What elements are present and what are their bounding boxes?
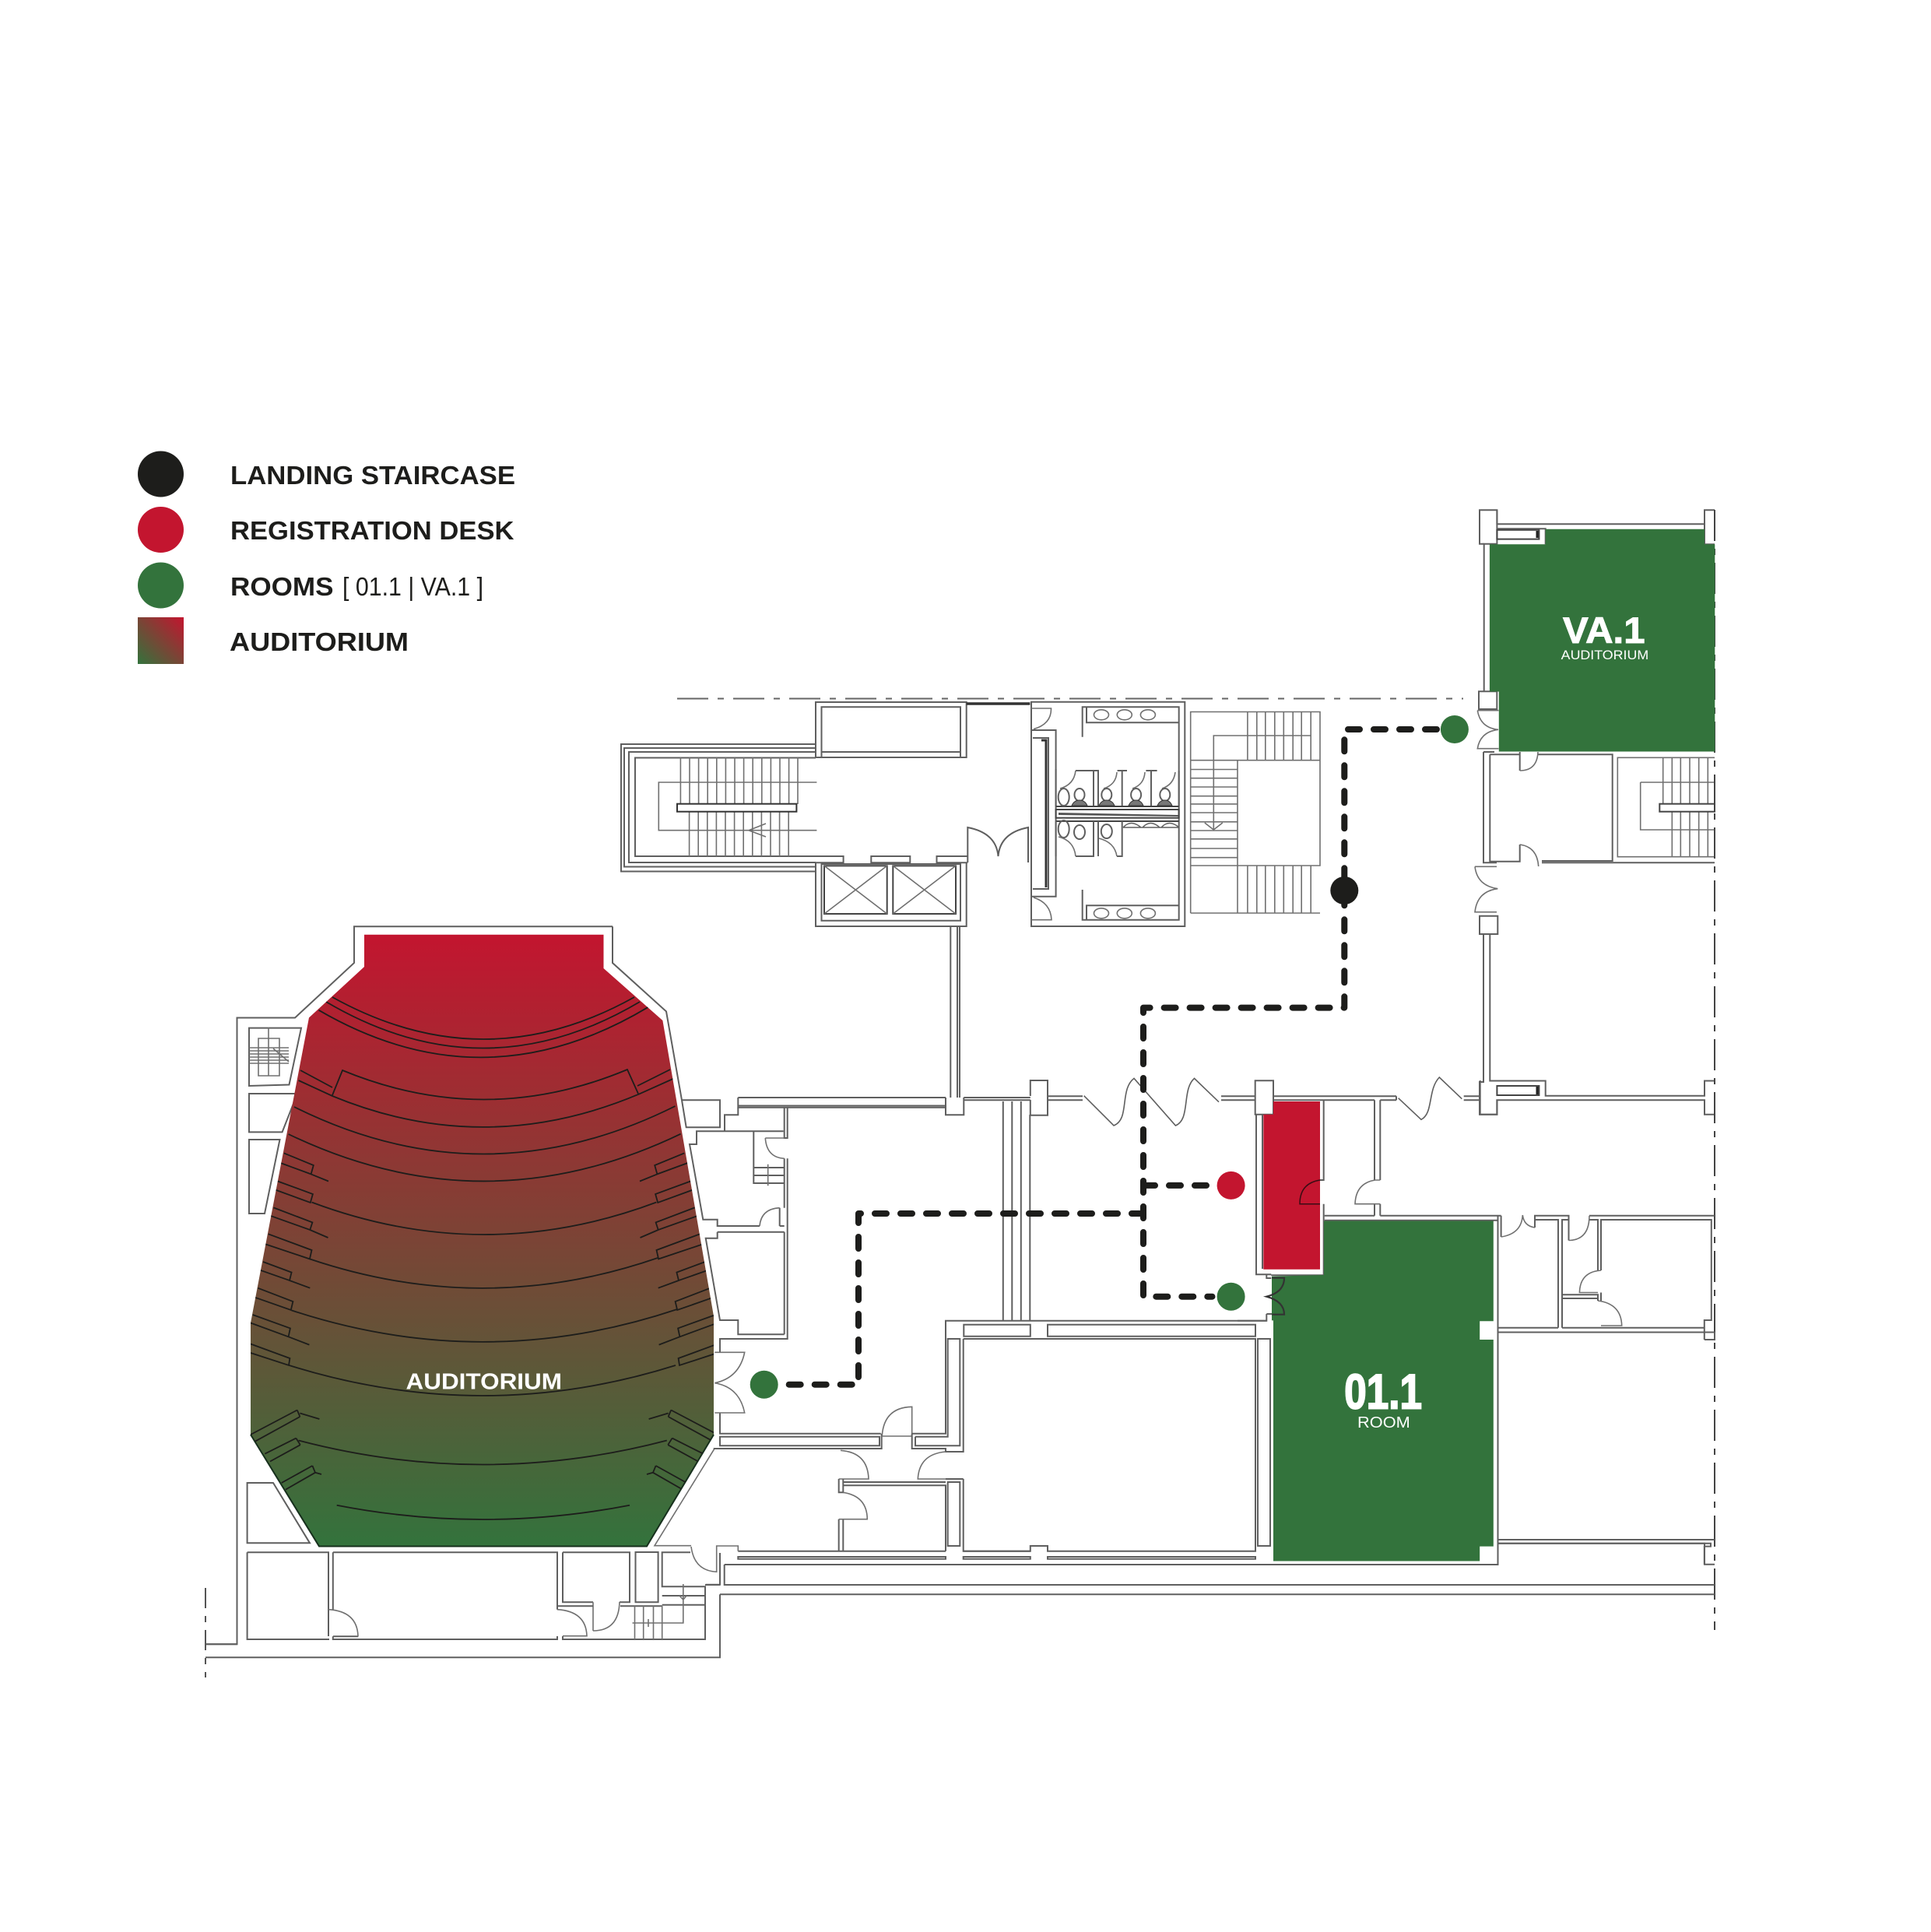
left side steps xyxy=(251,1153,328,1490)
right side steps xyxy=(640,1153,718,1490)
marker: room 01.1 xyxy=(1217,1283,1245,1311)
legend item: rooms: [ 01.1 | VA.1 ] xyxy=(342,572,483,601)
floor plan: elevators xyxy=(816,856,967,1098)
auditorium fill with seating rows xyxy=(251,935,718,1546)
south service rooms xyxy=(205,1552,720,1657)
legend item: auditorium xyxy=(138,617,409,664)
legend xyxy=(138,451,515,664)
legend item: auditorium: AUDITORIUM xyxy=(230,627,409,656)
room VA.1 xyxy=(1490,529,1715,752)
auditorium label: AUDITORIUM xyxy=(406,1370,562,1395)
room VA.1: VA.1 xyxy=(1563,609,1645,651)
rooms east of the auditorium xyxy=(613,926,1715,1594)
floor plan: double door xyxy=(967,827,1028,862)
legend item: landing staircase xyxy=(138,451,515,497)
rooms east of room 01.1 xyxy=(1238,1100,1715,1565)
room VA.1: AUDITORIUM xyxy=(1561,648,1648,662)
floor plan: storage room xyxy=(816,702,1030,757)
legend item: landing staircase: LANDING STAIRCASE xyxy=(230,461,515,490)
west service rooms xyxy=(205,926,613,1644)
marker: landing staircase xyxy=(1330,876,1358,905)
room VA.1 surroundings xyxy=(1475,510,1715,1115)
room 01.1 xyxy=(1266,1221,1494,1561)
legend item: rooms xyxy=(138,562,483,609)
floor plan: east stair block xyxy=(1191,711,1320,913)
floor plan: restrooms xyxy=(1031,702,1185,926)
registration desk area xyxy=(1263,1101,1320,1270)
marker: auditorium entrance xyxy=(750,1371,778,1399)
room 01.1: ROOM xyxy=(1357,1414,1410,1431)
main corridor walls xyxy=(738,1077,1497,1321)
legend item: registration desk xyxy=(138,507,514,553)
legend item: registration desk: REGISTRATION DESK xyxy=(230,516,514,545)
east boundary dash-dot xyxy=(1714,510,1715,1630)
south-west datum line xyxy=(205,1588,206,1677)
marker: registration desk xyxy=(1217,1171,1245,1200)
route: dashed path xyxy=(779,729,1437,1385)
legend item: rooms: ROOMS xyxy=(230,572,333,601)
floor plan: north-west stair block xyxy=(621,744,816,872)
datum line: top dash-dot xyxy=(677,697,1463,699)
room 01.1: 01.1 xyxy=(1344,1365,1422,1420)
seating rows xyxy=(251,997,718,1519)
marker: room VA.1 xyxy=(1441,715,1469,743)
